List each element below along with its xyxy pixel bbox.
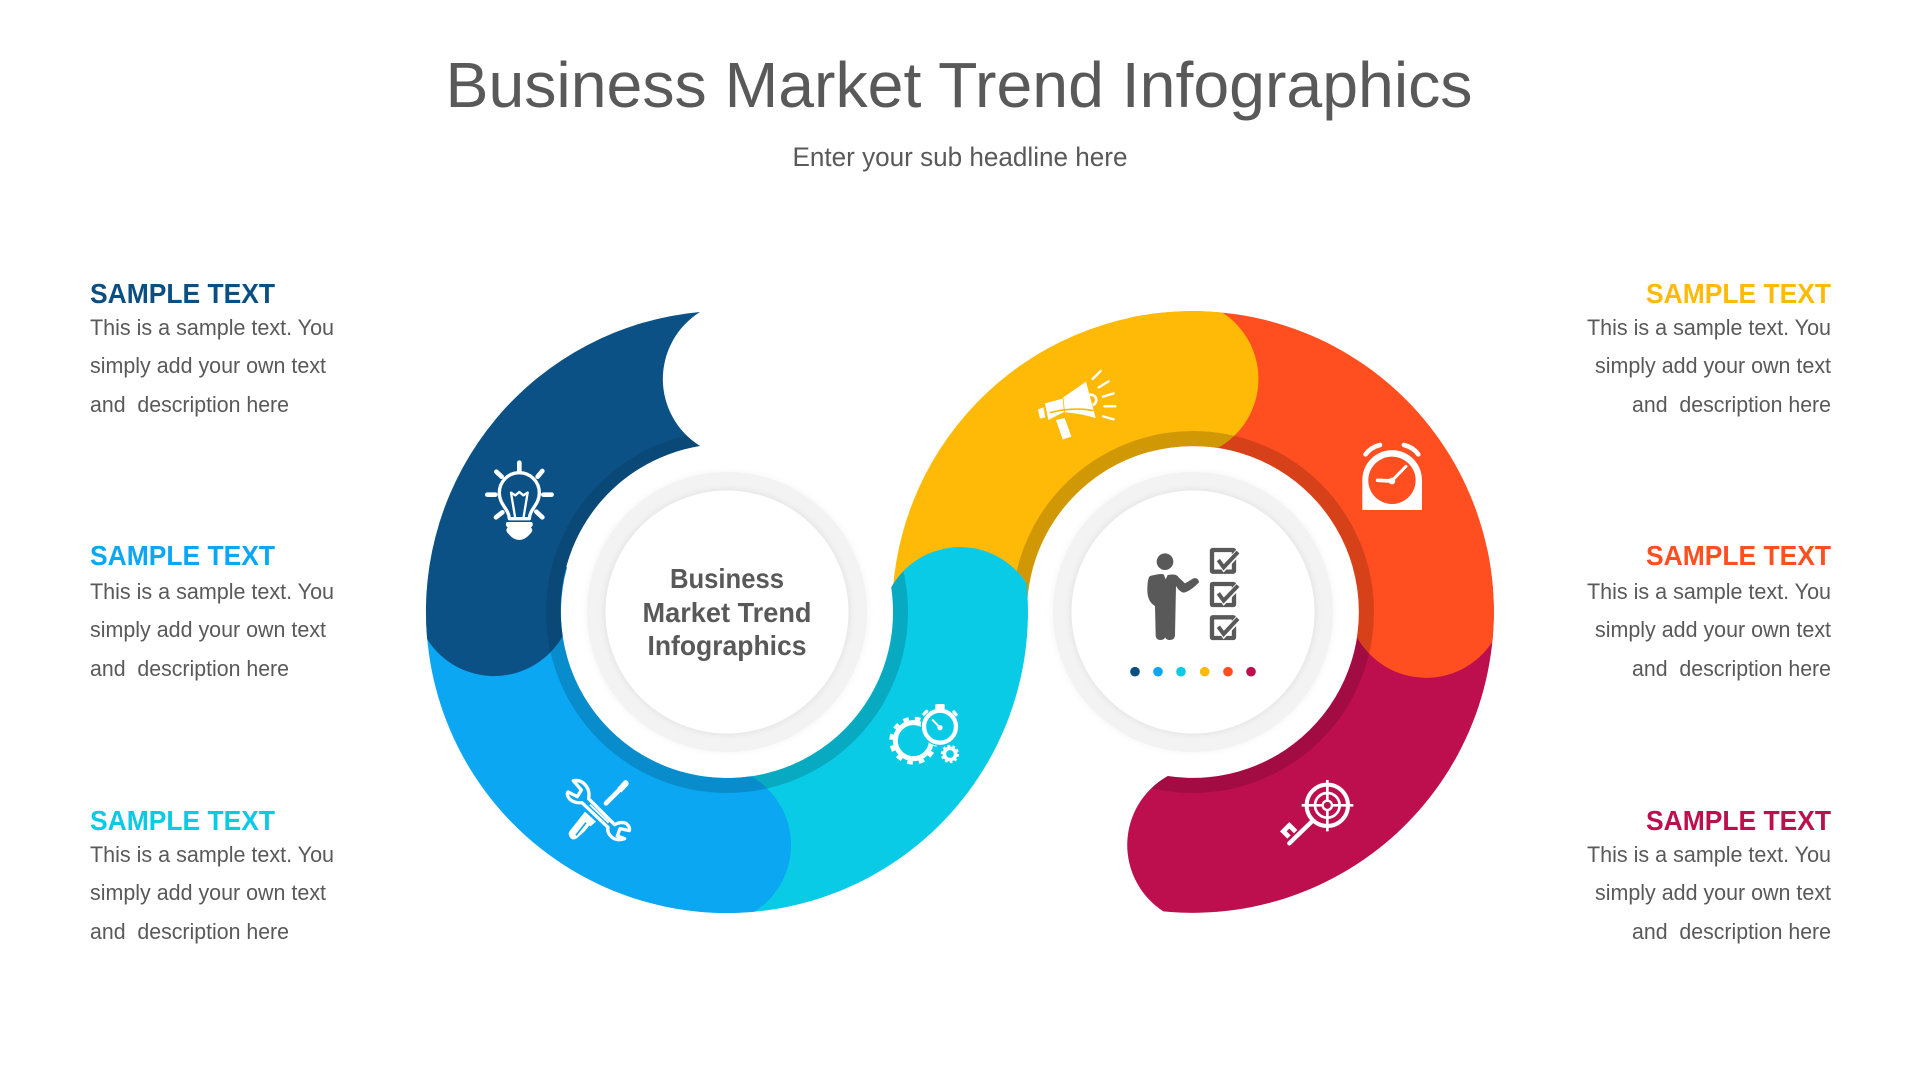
right center circle [1052, 471, 1334, 753]
text block: right 2 [1587, 540, 1831, 681]
icon: gears and stopwatch [891, 704, 959, 763]
icon: presenter with checklist [1147, 550, 1239, 640]
text block: right 1: simply add your own text [1595, 353, 1831, 378]
text block: left 2: simply add your own text [90, 617, 326, 642]
title: Business Market Trend Infographics [446, 49, 1472, 121]
text block: right 3: SAMPLE TEXT [1646, 805, 1831, 836]
text block: right 2: simply add your own text [1595, 617, 1831, 642]
segment: orange [1130, 311, 1494, 678]
text block: right 3: simply add your own text [1595, 880, 1831, 905]
text block: left 1: This is a sample text. You [90, 315, 334, 340]
left center circle [586, 471, 868, 753]
center label: Business [670, 563, 784, 594]
text block: left 1: SAMPLE TEXT [90, 278, 275, 309]
segment: crimson [1127, 549, 1494, 913]
text block: left 2: and description here [90, 656, 289, 681]
segment: navy [426, 312, 700, 676]
color dots [1130, 667, 1256, 676]
text block: left 3: SAMPLE TEXT [90, 805, 275, 836]
icon: light bulb [487, 463, 552, 540]
center label [642, 563, 812, 661]
icon: wrench and screwdriver [567, 780, 630, 840]
text block: right 1: SAMPLE TEXT [1646, 278, 1831, 309]
text block: left 3 [90, 805, 334, 944]
text block: left 1 [90, 278, 334, 417]
text block: right 3 [1587, 805, 1831, 944]
text block: right 2: and description here [1632, 656, 1831, 681]
text block: right 3: This is a sample text. You [1587, 842, 1831, 867]
icon: megaphone [1038, 371, 1115, 439]
text block: right 1 [1587, 278, 1831, 417]
center label: Infographics [648, 630, 806, 661]
text block: right 2: SAMPLE TEXT [1646, 540, 1831, 571]
icon: target key [1280, 780, 1353, 843]
text block: right 1: This is a sample text. You [1587, 315, 1831, 340]
text block: right 2: This is a sample text. You [1587, 579, 1831, 604]
text block: left 2: This is a sample text. You [90, 579, 334, 604]
segment: cyan [662, 547, 1028, 913]
icon: alarm clock [1362, 445, 1422, 510]
subtitle: Enter your sub headline here [792, 142, 1128, 172]
segment: blue [426, 546, 791, 913]
text block: right 3: and description here [1632, 919, 1831, 944]
center label: Market Trend [642, 597, 812, 628]
text block: left 1: and description here [90, 392, 289, 417]
text block: left 3: simply add your own text [90, 880, 326, 905]
text block: left 3: and description here [90, 919, 289, 944]
text block: left 1: simply add your own text [90, 353, 326, 378]
text block: left 3: This is a sample text. You [90, 842, 334, 867]
text block: right 1: and description here [1632, 392, 1831, 417]
text block: left 2 [90, 540, 334, 681]
text block: left 2: SAMPLE TEXT [90, 540, 275, 571]
segment: yellow [893, 311, 1258, 598]
